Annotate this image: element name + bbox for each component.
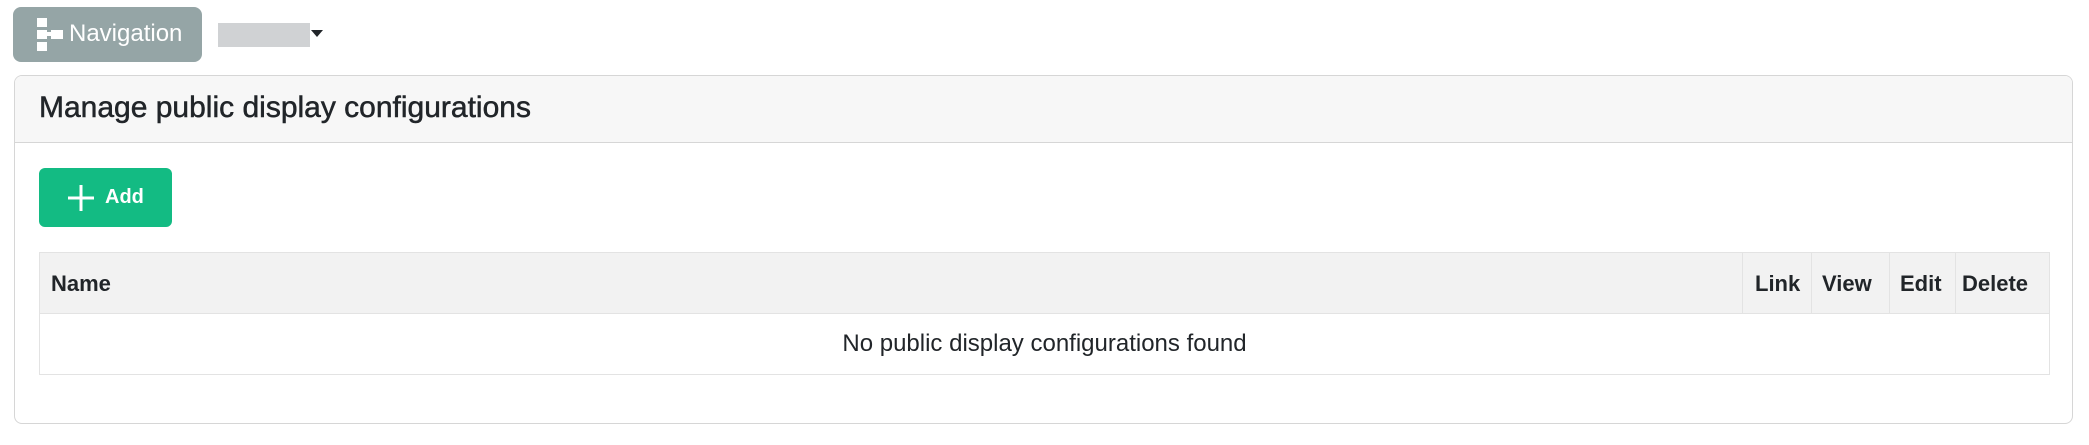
table <box>39 252 2050 375</box>
nav button <box>13 7 202 62</box>
table header: Name <box>51 271 111 296</box>
panel header <box>15 76 2072 143</box>
add button <box>39 168 172 227</box>
title: Manage public display configurations <box>39 91 531 124</box>
table header: Delete <box>1962 271 2028 296</box>
empty row text: No public display configurations found <box>842 330 1247 357</box>
table header: View <box>1822 271 1872 296</box>
table header: Link <box>1755 271 1800 296</box>
panel <box>14 75 2073 424</box>
icon: plus <box>68 185 94 211</box>
table header <box>40 253 2049 314</box>
add button: Add <box>105 186 144 208</box>
nav button: Navigation <box>69 20 182 47</box>
icon: navigation tree <box>37 18 63 51</box>
dropdown placeholder <box>218 23 323 47</box>
table header: Edit <box>1900 271 1942 296</box>
